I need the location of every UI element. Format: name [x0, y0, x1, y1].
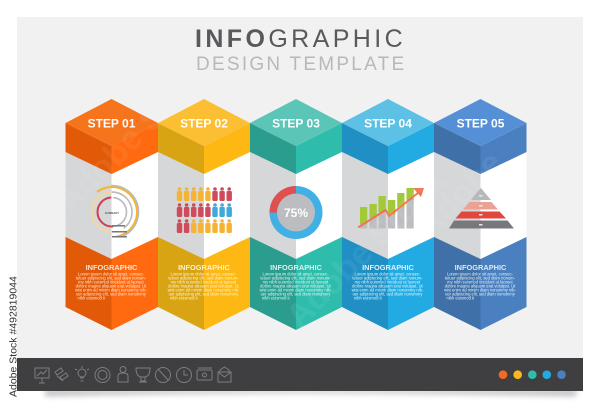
column: step 02: [158, 99, 250, 330]
icon: concentric summary rings: SUMMARY: [105, 211, 119, 215]
icon: light bulb: [75, 366, 89, 381]
icon: trophy: [136, 368, 150, 382]
watermark: Adobe: [409, 144, 510, 246]
icon: money note: [197, 368, 212, 380]
icon: person: [118, 366, 128, 382]
step 05 body text: Lorem ipsum dolor sit amet, consec-: [447, 272, 514, 276]
step 03 body text: my nibh euismod tincidunt ut laoreet: [263, 280, 329, 284]
step 04 body text: uer adipiscing elit, sed diam nonummy: [353, 292, 423, 296]
step 03 heading: INFOGRAPHIC: [270, 263, 323, 272]
step 02 body text: wisi enim ad minim diam nonummy nib-: [168, 288, 240, 292]
step 03 label: STEP 03: [272, 116, 320, 130]
column: step 01: [66, 99, 158, 330]
step 03 body text: tetuer adipiscing elit, sed diam nonum-: [260, 276, 331, 280]
step 01 body text: my nibh euismod tincidunt ut laoreet: [78, 280, 145, 284]
icon: 75% donut chart: [270, 186, 322, 239]
step 04 body text: my nibh euismod tincidunt ut laoreet: [355, 280, 421, 284]
step 05 label: STEP 05: [457, 116, 505, 130]
step 03 body text: Lorem ipsum dolor sit amet, consec-: [262, 272, 329, 276]
icon: clock: [176, 368, 192, 382]
step 02 label: STEP 02: [180, 116, 228, 130]
watermark: Adobe Stock: [279, 162, 453, 336]
column: step 03: [250, 99, 342, 330]
step 01 body text: wisi enim ad minim diam nonummy nib-: [75, 288, 147, 292]
step 04 body text: tetuer adipiscing elit, sed diam nonum-: [352, 276, 423, 280]
stock id side label: Adobe Stock #492819044: [8, 276, 20, 397]
step 02 body text: my nibh euismod tincidunt ut laoreet: [171, 280, 237, 284]
step 04 body text: wisi enim ad minim diam nonummy nib-: [352, 288, 424, 292]
icon: rising bar chart with arrow: [358, 188, 424, 228]
column: step 05: [434, 99, 526, 330]
icon: concentric summary rings: [83, 183, 141, 241]
icon: envelope: [218, 367, 231, 382]
step 03 body text: uer adipiscing elit, sed diam nonummy: [261, 292, 331, 296]
watermark: Adobe Stock: [49, 47, 223, 221]
bar shadow: [45, 390, 578, 396]
step 02 body text: dolore magna aliquam erat volutpat. Ut: [168, 284, 240, 288]
footer bar: [17, 358, 583, 391]
watermark: [49, 47, 510, 336]
background panel: [17, 17, 583, 358]
icon: 75% donut chart: 75%: [284, 206, 308, 220]
step 03 body text: dolore magna aliquam erat volutpat. Ut: [260, 284, 332, 288]
title: INFOGRAPHIC: [195, 25, 406, 53]
step 05 body text: my nibh euismod tincidunt ut laoreet: [447, 280, 514, 284]
step 05 body text: uer adipiscing elit, sed diam nonummy: [445, 292, 516, 296]
footer icon row: [35, 366, 231, 383]
step 02 body text: Lorem ipsum dolor sit amet, consec-: [170, 272, 237, 276]
icon: gear: [95, 368, 110, 382]
step 03 body text: nibh euismod ti: [262, 296, 290, 300]
step 02 heading: INFOGRAPHIC: [178, 263, 231, 272]
step 04 label: STEP 04: [364, 116, 412, 130]
step 01 body text: tetuer adipiscing elit, sed diam nonum-: [76, 276, 147, 280]
step 02 body text: nibh euismod ti: [170, 296, 198, 300]
icon: pie circle: [156, 368, 170, 382]
icon: people grid: [177, 187, 232, 233]
step 01 heading: INFOGRAPHIC: [86, 263, 138, 272]
step 02 body text: uer adipiscing elit, sed diam nonummy: [169, 292, 239, 296]
column: step 04: [342, 99, 434, 330]
title: [195, 25, 406, 75]
step 01 body text: nibh euismod ti: [78, 296, 105, 300]
step 01 body text: dolore magna aliquam erat volutpat. Ut: [76, 284, 147, 288]
step 03 body text: wisi enim ad minim diam nonummy nib-: [260, 288, 332, 292]
step 01 body text: Lorem ipsum dolor sit amet, consec-: [78, 272, 145, 276]
step 05 body text: dolore magna aliquam erat volutpat. Ut: [445, 284, 516, 288]
step 04 heading: INFOGRAPHIC: [362, 263, 415, 272]
icon: presentation board: [35, 368, 49, 383]
step 04 body text: nibh euismod ti: [354, 296, 382, 300]
icon: links: [55, 368, 68, 381]
icon: layered pyramid: [449, 188, 514, 228]
step 01 body text: uer adipiscing elit, sed diam nonummy: [76, 292, 147, 296]
step 04 body text: dolore magna aliquam erat volutpat. Ut: [352, 284, 424, 288]
step 01 label: STEP 01: [88, 116, 136, 130]
step 05 heading: INFOGRAPHIC: [455, 263, 507, 272]
title: DESIGN TEMPLATE: [196, 54, 406, 75]
step 05 body text: nibh euismod ti: [446, 296, 474, 300]
step 02 body text: tetuer adipiscing elit, sed diam nonum-: [168, 276, 239, 280]
step 04 body text: Lorem ipsum dolor sit amet, consec-: [354, 272, 421, 276]
step 05 body text: tetuer adipiscing elit, sed diam nonum-: [445, 276, 516, 280]
step 05 body text: wisi enim ad minim diam nonummy nib-: [444, 288, 516, 292]
colour dots: [499, 370, 566, 379]
